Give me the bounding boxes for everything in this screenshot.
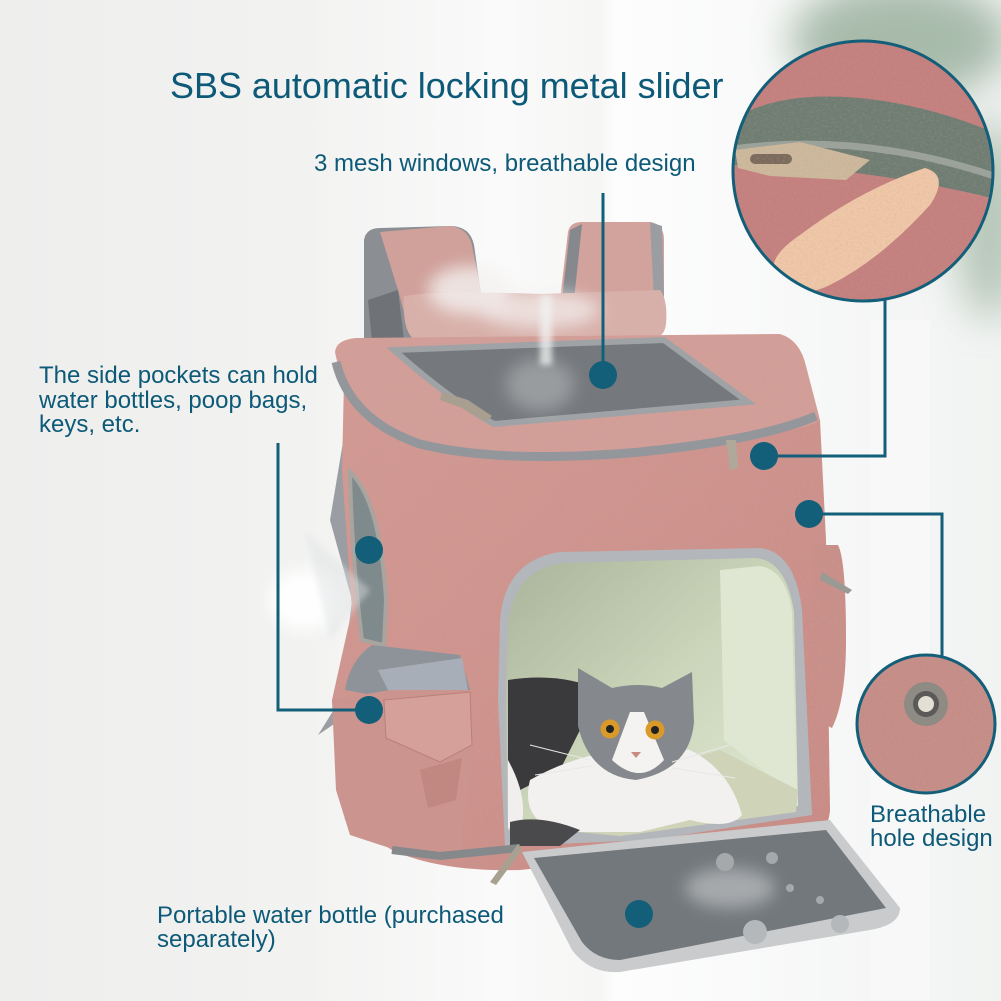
label: breathable hole: hole design bbox=[870, 825, 993, 852]
label: breathable hole: Breathable bbox=[870, 801, 986, 828]
bottom zipper bbox=[392, 848, 520, 856]
inset: breathable hole bbox=[858, 656, 994, 792]
front flap bbox=[522, 820, 900, 972]
shoulder straps bbox=[364, 222, 664, 342]
side dark strap bbox=[318, 430, 372, 735]
label: water bottle: separately) bbox=[157, 926, 276, 953]
fabric texture bbox=[812, 650, 821, 819]
label: side pockets: water bottles, poop bags, bbox=[38, 387, 307, 414]
label: mesh windows: 3 mesh windows, breathable design bbox=[314, 150, 696, 177]
inset ring bbox=[733, 41, 993, 301]
top handle bbox=[404, 290, 666, 340]
label: water bottle: Portable water bottle (purchased bbox=[157, 902, 504, 929]
label: side pockets: keys, etc. bbox=[39, 411, 140, 438]
top mesh window bbox=[394, 340, 748, 424]
zipper pull top bbox=[440, 392, 492, 422]
markers bbox=[355, 361, 823, 928]
inset: zipper slider bbox=[725, 40, 1000, 305]
side pocket bbox=[332, 645, 472, 858]
side mesh window bbox=[350, 472, 386, 645]
main body bbox=[332, 380, 830, 870]
callout lines bbox=[278, 193, 942, 710]
zipper band bbox=[336, 362, 816, 456]
hole ring bbox=[857, 655, 995, 793]
lid top bbox=[335, 334, 820, 456]
cat bbox=[508, 668, 742, 846]
wind gust bbox=[269, 570, 341, 630]
label: side pockets: The side pockets can hold bbox=[39, 362, 318, 389]
front opening bbox=[498, 548, 812, 846]
heading: SBS automatic locking metal slider bbox=[170, 65, 724, 106]
cat head bbox=[578, 668, 694, 780]
backpack bbox=[269, 222, 900, 972]
right pocket bbox=[812, 545, 846, 728]
